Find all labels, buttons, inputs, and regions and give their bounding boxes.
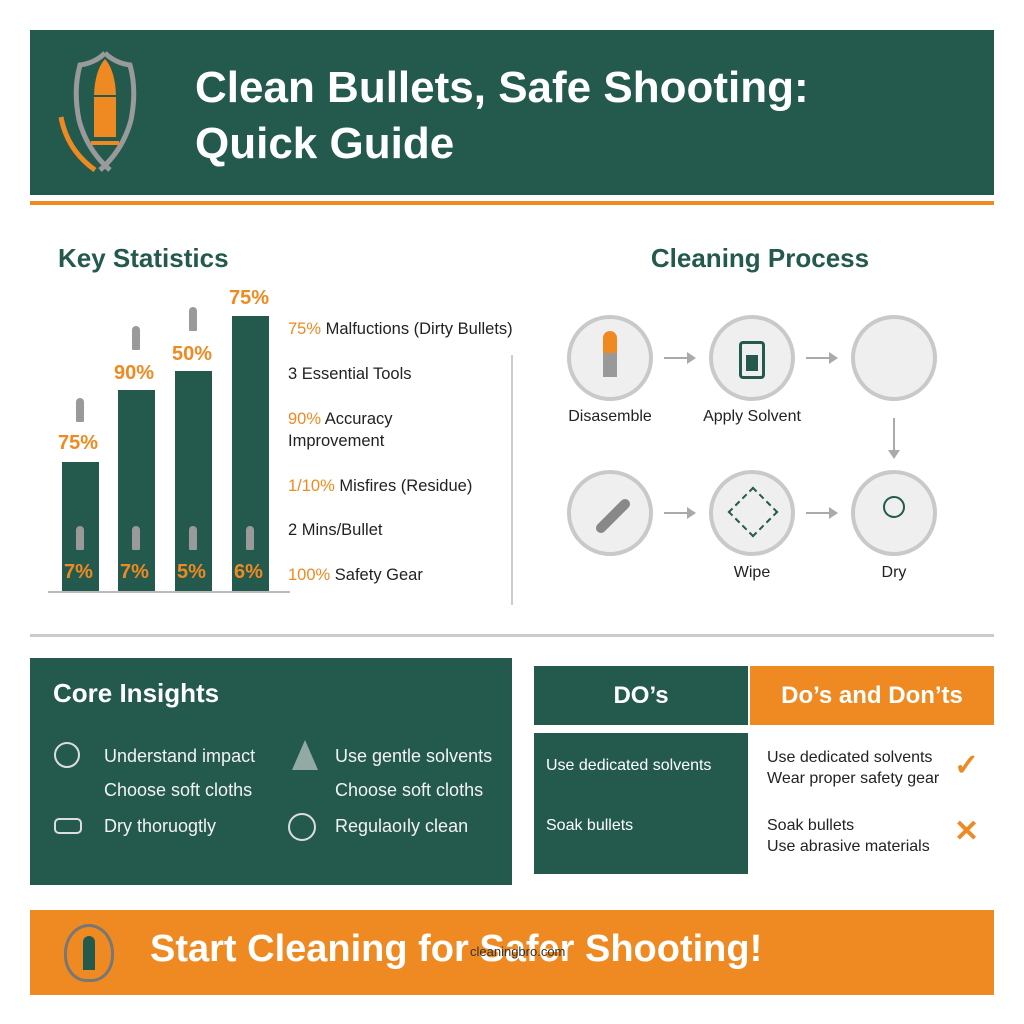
heading: cleaning process: Cleaning Process	[651, 243, 869, 273]
stats list: Improvement	[288, 432, 384, 450]
panel: core insights: Understand impact	[104, 746, 255, 766]
table: do's and don'ts: DO’s	[613, 682, 669, 709]
panel: core insights: Choose soft cloths	[104, 780, 252, 800]
bar chart: 6%	[234, 561, 263, 583]
table: do's and don'ts: Use dedicated solvents	[767, 749, 932, 766]
bar chart: 7%	[64, 561, 93, 583]
panel: core insights	[30, 658, 512, 885]
process diagram: Dry	[882, 564, 906, 581]
process diagram: Wipe	[734, 564, 770, 581]
title: Clean Bullets, Safe Shooting:	[195, 63, 809, 112]
table: do's and don'ts: Use dedicated solvents	[546, 757, 711, 774]
table: do's and don'ts: ✓	[954, 749, 979, 782]
stats list: 3 Essential Tools	[288, 365, 412, 383]
header banner	[30, 30, 994, 195]
icon: shield bullet	[58, 51, 136, 172]
process diagram	[567, 315, 937, 581]
bar chart	[48, 287, 290, 593]
table: do's and don'ts: Use abrasive materials	[767, 838, 930, 855]
process diagram: Apply Solvent	[703, 408, 801, 425]
panel: core insights: Choose soft cloths	[335, 780, 483, 800]
bar chart: 75%	[58, 432, 98, 454]
footer banner: Start Cleaning for Safer Shooting!	[150, 928, 762, 970]
stats list: 1/10% Misfires (Residue)	[288, 477, 472, 495]
stats list: 100% Safety Gear	[288, 566, 423, 584]
panel: core insights: Dry thoruogtly	[104, 816, 216, 836]
stats list: 2 Mins/Bullet	[288, 521, 382, 539]
bar chart: 7%	[120, 561, 149, 583]
heading: key statistics: Key Statistics	[58, 243, 229, 273]
process diagram: Disasemble	[568, 408, 652, 425]
stats list: 75% Malfuctions (Dirty Bullets)	[288, 320, 513, 338]
bar chart: 5%	[177, 561, 206, 583]
title	[195, 63, 809, 168]
title: Quick Guide	[195, 119, 454, 168]
bar chart: 90%	[114, 362, 154, 384]
table: do's and don'ts: Soak bullets	[767, 817, 854, 834]
table: do's and don'ts: Wear proper safety gear	[767, 770, 939, 787]
table: do's and don'ts: Do’s and Don’ts	[781, 682, 963, 709]
footer banner	[30, 910, 994, 995]
panel: core insights: Core Insights	[53, 678, 219, 708]
table: do's and don'ts: ✕	[954, 815, 979, 848]
panel: core insights: Use gentle solvents	[335, 746, 492, 766]
table: do's and don'ts: Soak bullets	[546, 817, 633, 834]
panel: core insights: Regulaoıly clean	[335, 816, 468, 836]
bar chart: 50%	[172, 343, 212, 365]
footer banner: cleaningbro.com	[470, 944, 565, 959]
stats list	[288, 320, 513, 584]
table: do's and don'ts	[534, 666, 994, 874]
bar chart: 75%	[229, 287, 269, 309]
stats list: 90% Accuracy	[288, 410, 393, 428]
